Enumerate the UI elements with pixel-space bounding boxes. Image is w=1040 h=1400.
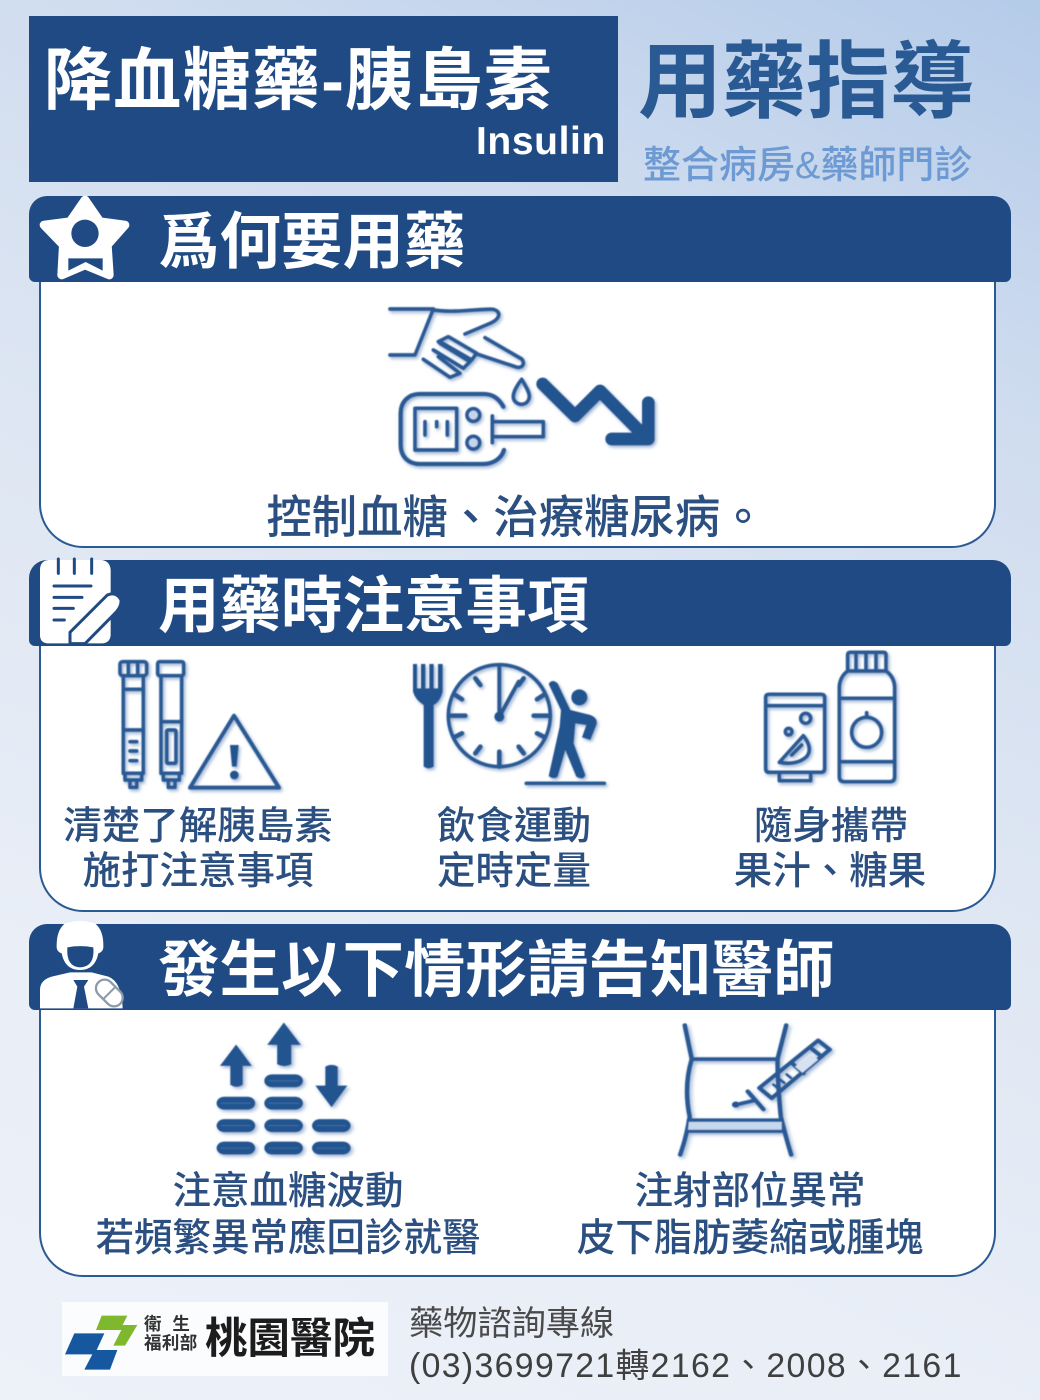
heading: 發生以下情形請告知醫師 xyxy=(158,936,835,1005)
english drug name: Insulin xyxy=(476,120,606,163)
panel body xyxy=(39,998,996,1277)
panel body xyxy=(39,634,996,912)
phone numbers: (03)3699721轉2162、2008、2161 xyxy=(409,1347,963,1385)
ministry name: 福利部 xyxy=(144,1333,198,1353)
text: understand insulin precautions: 清楚了解胰島素 xyxy=(63,805,333,848)
icon: star with person xyxy=(40,196,130,280)
text: diet and exercise: 飲食運動 xyxy=(437,805,591,848)
icon: notepad and pencil xyxy=(40,558,120,644)
section header bar xyxy=(29,196,1011,282)
title text: 降血糖藥-胰島素 xyxy=(44,43,553,119)
icon: blood glucose meter with falling arrow xyxy=(387,306,658,470)
text: juice, candy: 果汁、糖果 xyxy=(734,850,926,893)
text: control blood sugar: 控制血糖、治療糖尿病。 xyxy=(266,492,766,543)
panel: precautions when using medication xyxy=(29,558,1011,912)
icon: hospital mark xyxy=(65,1316,138,1370)
heading: 用藥時注意事項 xyxy=(158,572,589,641)
panel: why use medication xyxy=(29,196,1011,548)
icon: doctor with pill xyxy=(40,921,124,1008)
text: regular and measured: 定時定量 xyxy=(437,850,591,893)
panel body xyxy=(39,270,996,548)
icon: insulin pens and warning triangle xyxy=(117,658,284,794)
text: lipoatrophy or lump: 皮下脂肪萎縮或腫塊 xyxy=(577,1217,923,1260)
icon: fluctuating blood sugar stacks and arrows xyxy=(216,1022,356,1159)
panel: tell your doctor when xyxy=(29,921,1011,1277)
icon: abdomen with insulin pen xyxy=(677,1022,836,1160)
ministry name xyxy=(144,1314,198,1353)
hospital name: 桃園醫院 xyxy=(205,1316,375,1363)
icon: fork, clock and exercising person xyxy=(412,662,610,790)
text: injection site abnormal: 注射部位異常 xyxy=(634,1170,866,1213)
text: note blood sugar fluctuation: 注意血糖波動 xyxy=(172,1170,404,1213)
section header bar xyxy=(29,560,1011,646)
title banner xyxy=(29,16,618,182)
ministry name: 衛 生 xyxy=(144,1314,190,1334)
label: drug consultation hotline: 藥物諮詢專線 xyxy=(409,1305,614,1343)
section header bar xyxy=(29,924,1011,1010)
heading: 爲何要用藥 xyxy=(158,208,466,277)
hospital logo xyxy=(62,1302,388,1376)
icon: juice glass and bottle xyxy=(762,650,900,788)
heading: medication guidance: 用藥指導 xyxy=(638,35,974,129)
subheading: ward and pharmacist clinic: 整合病房&藥師門診 xyxy=(643,145,972,187)
text: frequent abnormalities need follow up: 若頻繁異常應回診就醫 xyxy=(95,1217,481,1260)
text: carry with you: 隨身攜帶 xyxy=(754,805,908,848)
text: injection precautions: 施打注意事項 xyxy=(82,850,314,893)
